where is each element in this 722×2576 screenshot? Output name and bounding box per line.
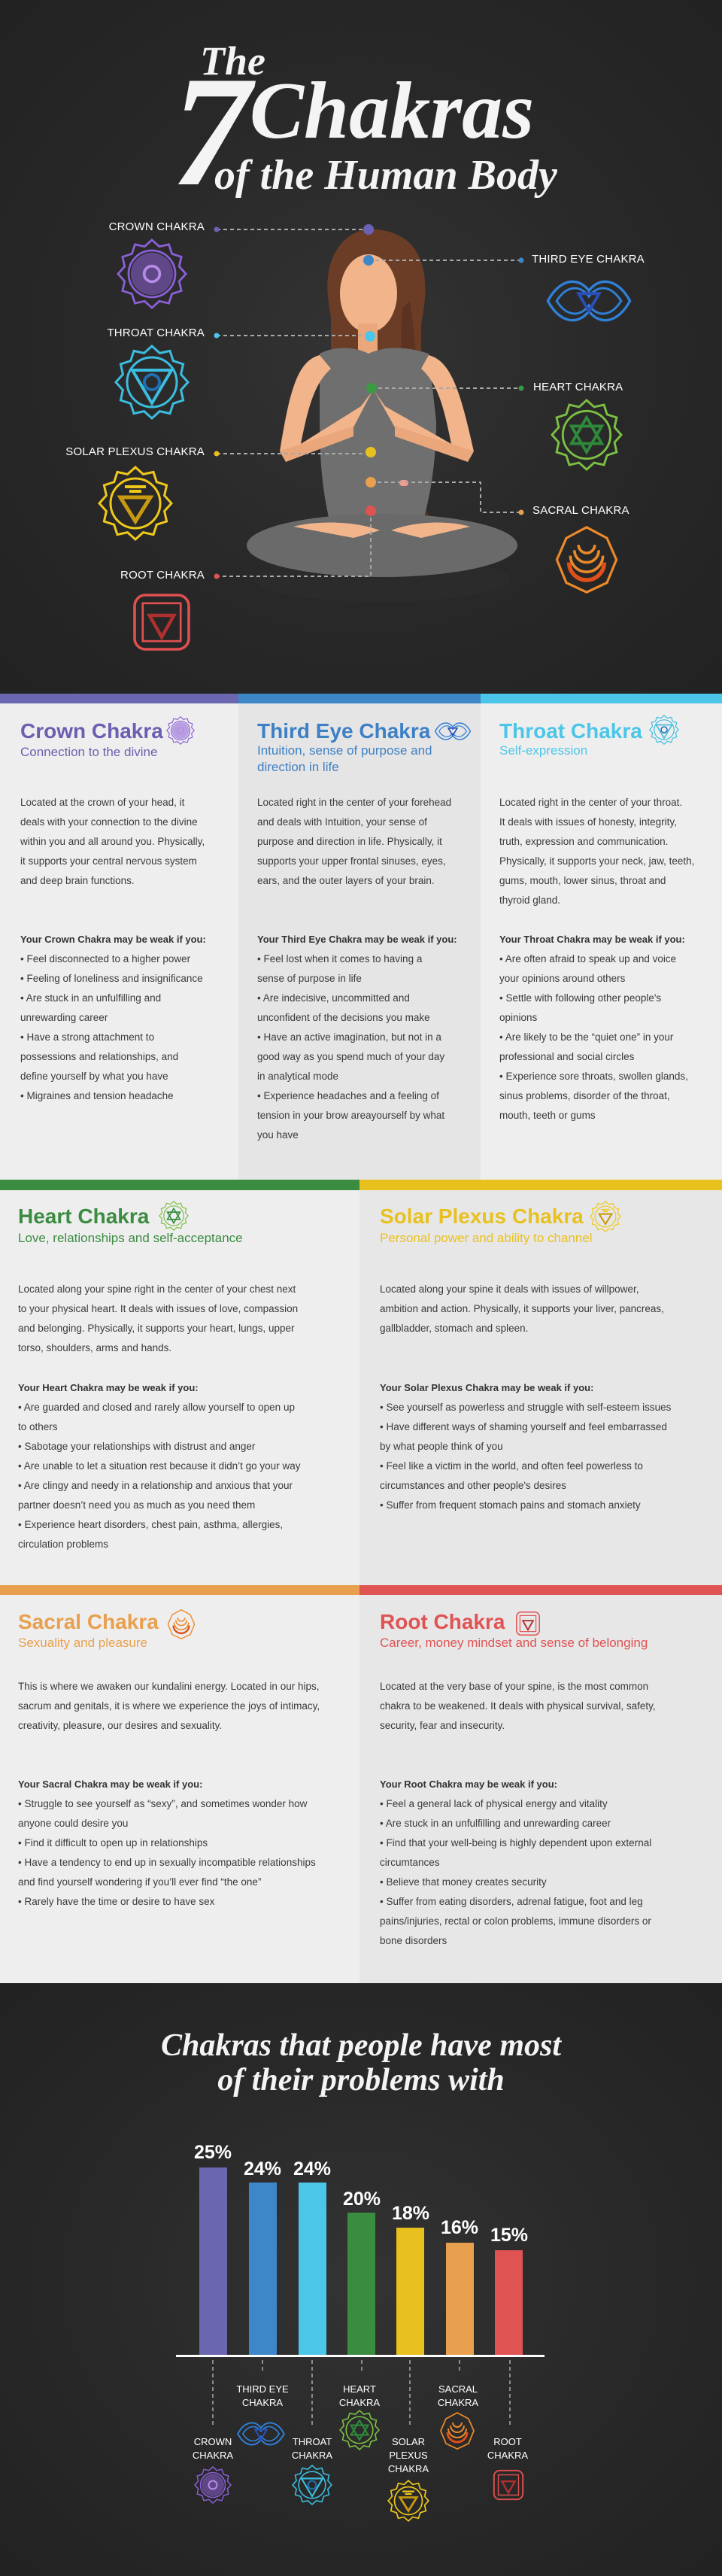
weak list: opinions: [499, 1012, 537, 1023]
weak list: [18, 1779, 316, 1907]
subtitle: Connection to the divine: [20, 745, 157, 759]
title: The 7 Chakras of the Human Body: Chakras: [250, 66, 534, 156]
weak list: possessions and relationships, and: [20, 1051, 178, 1062]
body text: This is where we awaken our kundalini energy. Located in our hips,: [18, 1681, 319, 1692]
subtitle: Career, money mindset and sense of belonging: [380, 1636, 648, 1650]
weak list: • Are stuck in an unfulfilling and unrewarding career: [380, 1818, 611, 1829]
subtitle: direction in life: [257, 760, 339, 774]
chart labels and icons: CROWN: [194, 2436, 232, 2447]
subtitle: Self-expression: [499, 743, 587, 758]
title: The 7 Chakras of the Human Body: [171, 38, 557, 219]
body text: torso, shoulders, arms and hands.: [18, 1342, 171, 1353]
chart section: HEART: [343, 2383, 376, 2395]
body text: Physically, it supports your neck, jaw, teeth,: [499, 855, 694, 867]
weak list: good way as you spend much of your day: [257, 1051, 444, 1062]
weak list: • Are clingy and needy in a relationship and anxious that your: [18, 1480, 293, 1491]
body text: thyroid gland.: [499, 895, 560, 906]
label: heart chakra: HEART CHAKRA: [533, 381, 623, 393]
body text: Located along your spine it deals with issues of willpower,: [380, 1283, 639, 1295]
weak list: anyone could desire you: [18, 1818, 128, 1829]
body text: ambition and action. Physically, it supports your liver, pancreas,: [380, 1303, 664, 1314]
weak list: pains/injuries, rectal or colon problems, immune disorders or: [380, 1915, 651, 1927]
subtitle: Intuition, sense of purpose and: [257, 743, 432, 758]
weak list: circumtances: [380, 1857, 440, 1868]
panel: solar plexus chakra: [359, 1190, 722, 1585]
icon: throat small: [649, 715, 679, 745]
body text: ears, and the outer layers of your brain.: [257, 875, 435, 886]
body text: and deep brain functions.: [20, 875, 135, 886]
body text: It deals with issues of honesty, integrity,: [499, 816, 677, 828]
body text: [18, 1681, 320, 1731]
weak list: • Migraines and tension headache: [20, 1090, 174, 1101]
body text: and belonging. Physically, it supports your heart, lungs, upper: [18, 1323, 294, 1334]
body text: [380, 1283, 664, 1334]
label: solar plexus chakra: SOLAR PLEXUS CHAKRA: [65, 445, 205, 458]
panel: sacral chakra: [0, 1595, 359, 1983]
bar: sacral 16%: 16%: [441, 2217, 478, 2238]
body text: and deals with Intuition, your sense of: [257, 816, 427, 828]
weak list: Your Throat Chakra may be weak if you:: [499, 934, 685, 945]
label: throat chakra: THROAT CHAKRA: [107, 327, 205, 339]
icon: third eye: [546, 280, 632, 322]
weak list: • Are likely to be the “quiet one” in your: [499, 1031, 673, 1043]
chart section: PLEXUS: [389, 2450, 428, 2461]
chart section: CHAKRA: [242, 2397, 283, 2408]
chart section: CHAKRA: [292, 2450, 332, 2461]
body text: [257, 797, 451, 886]
body text: creativity, pleasure, our desires and sexuality.: [18, 1720, 222, 1731]
body text: gums, mouth, lower sinus, throat and: [499, 875, 666, 886]
weak list: • Have an active imagination, but not in a: [257, 1031, 441, 1043]
icon: crown: [117, 238, 187, 309]
chart title: [161, 2028, 563, 2098]
icon: sacral small: [167, 1609, 196, 1639]
bar: root 15%: [490, 2225, 528, 2356]
heading: crown: Crown Chakra: [20, 719, 163, 743]
weak list: to others: [18, 1421, 58, 1432]
heading: heart: Heart Chakra: [18, 1204, 149, 1228]
weak list: • Experience headaches and a feeling of: [257, 1090, 439, 1101]
body text: purpose and direction in life. Physically, it: [257, 836, 442, 847]
weak list: [380, 1779, 651, 1946]
weak list: • Experience sore throats, swollen glands,: [499, 1071, 688, 1082]
body text: Located at the crown of your head, it: [20, 797, 184, 808]
panel: throat chakra: [481, 703, 722, 1180]
chart section: CHAKRA: [438, 2397, 478, 2408]
bar: third eye 24%: [244, 2158, 281, 2356]
icon: solar plexus: [98, 466, 173, 541]
weak list: • Have a tendency to end up in sexually incompatible relationships: [18, 1857, 316, 1868]
section 2 color bars: [0, 1180, 722, 1190]
icon: third eye small: [435, 722, 471, 740]
chart section: CHAKRA: [487, 2450, 528, 2461]
weak list: • Struggle to see yourself as “sexy”, and sometimes wonder how: [18, 1798, 307, 1809]
body text: security, fear and insecurity.: [380, 1720, 505, 1731]
bar: solar plexus 18%: 18%: [392, 2203, 429, 2224]
subtitle: Love, relationships and self-acceptance: [18, 1231, 243, 1245]
panel: heart chakra: [0, 1190, 359, 1585]
weak list: • See yourself as powerless and struggle with self-esteem issues: [380, 1402, 671, 1413]
weak list: and find yourself wondering if you’ll ever find “the one”: [18, 1876, 261, 1888]
body text: within you and all around you. Physically,: [20, 836, 205, 847]
icon: heart: [551, 399, 623, 471]
chart title: of their problems with: [217, 2063, 505, 2098]
title: The 7 Chakras of the Human Body: The: [200, 38, 265, 84]
label: sacral chakra: SACRAL CHAKRA: [532, 504, 629, 517]
bar: heart 20%: [343, 2189, 381, 2356]
weak list: • Sabotage your relationships with distrust and anger: [18, 1441, 255, 1452]
weak list: • Believe that money creates security: [380, 1876, 547, 1888]
heading: root: Root Chakra: [380, 1610, 505, 1633]
body text: Located at the very base of your spine, is the most common: [380, 1681, 648, 1692]
label: root chakra: ROOT CHAKRA: [120, 569, 205, 582]
weak list: Your Third Eye Chakra may be weak if you:: [257, 934, 457, 945]
weak list: [18, 1382, 301, 1550]
bar: crown 25%: 25%: [194, 2142, 232, 2163]
weak list: [499, 934, 688, 1121]
subtitle: Sexuality and pleasure: [18, 1636, 147, 1650]
weak list: circulation problems: [18, 1539, 108, 1550]
weak list: circumstances and other people's desires: [380, 1480, 566, 1491]
bar: heart 20%: 20%: [343, 2189, 381, 2210]
weak list: sense of purpose in life: [257, 973, 362, 984]
title: The 7 Chakras of the Human Body: 7: [171, 44, 250, 219]
chart section: THIRD EYE: [236, 2383, 289, 2395]
weak list: unconfident of the decisions you make: [257, 1012, 430, 1023]
weak list: Your Heart Chakra may be weak if you:: [18, 1382, 199, 1393]
weak list: • Suffer from frequent stomach pains and stomach anxiety: [380, 1499, 641, 1511]
weak list: mouth, teeth or gums: [499, 1110, 596, 1121]
illustration: meditating woman: [247, 229, 517, 577]
icon: root: [133, 594, 190, 651]
icon: root small: [516, 1612, 540, 1636]
body text: sacrum and genitals, it is where we experience the joys of intimacy,: [18, 1700, 320, 1712]
chart section: CHAKRA: [388, 2463, 429, 2474]
body text: [18, 1283, 298, 1353]
panel: third eye chakra: [238, 703, 481, 1180]
weak list: • Are unable to let a situation rest because it didn’t go your way: [18, 1460, 300, 1472]
weak list: • Have a strong attachment to: [20, 1031, 154, 1043]
chart title: Chakras that people have most: [161, 2028, 561, 2063]
weak list: • Are stuck in an unfulfilling and: [20, 992, 161, 1004]
chart section: THROAT: [293, 2436, 332, 2447]
weak list: professional and social circles: [499, 1051, 634, 1062]
weak list: unrewarding career: [20, 1012, 108, 1023]
label: crown chakra: CROWN CHAKRA: [109, 220, 205, 233]
icon: throat: [114, 345, 190, 420]
panel: crown chakra: [0, 703, 238, 1180]
chart labels and icons: [193, 2436, 233, 2461]
bar: solar plexus 18%: [392, 2203, 429, 2356]
weak list: • Find it difficult to open up in relationships: [18, 1837, 208, 1848]
weak list: [20, 934, 206, 1101]
label: third eye chakra: THIRD EYE CHAKRA: [532, 253, 645, 266]
heading: solar plexus: Solar Plexus Chakra: [380, 1204, 584, 1228]
bar: crown 25%: [194, 2142, 232, 2356]
body text: Located right in the center of your throat.: [499, 797, 682, 808]
weak list: • Find that your well-being is highly dependent upon external: [380, 1837, 651, 1848]
weak list: Your Root Chakra may be weak if you:: [380, 1779, 557, 1790]
subtitle: [257, 743, 432, 774]
connector lines (dashed): [214, 224, 523, 579]
chart section: SOLAR: [392, 2436, 425, 2447]
chart section: [0, 1983, 722, 2576]
bar: third eye 24%: 24%: [244, 2158, 281, 2180]
icon: sacral: [555, 526, 618, 594]
weak list: partner doesn’t need you as much as you need them: [18, 1499, 255, 1511]
panel: root chakra: [359, 1595, 722, 1983]
body text: deals with your connection to the divine: [20, 816, 198, 828]
weak list: you have: [257, 1129, 299, 1141]
weak list: • Feel like a victim in the world, and often feel powerless to: [380, 1460, 643, 1472]
bar: throat 24%: [293, 2158, 331, 2356]
chakra dots on body: [214, 224, 523, 579]
weak list: • Suffer from eating disorders, adrenal fatigue, foot and leg: [380, 1896, 643, 1907]
weak list: • Are often afraid to speak up and voice: [499, 953, 676, 964]
weak list: your opinions around others: [499, 973, 625, 984]
chart section: ROOT: [493, 2436, 522, 2447]
weak list: Your Solar Plexus Chakra may be weak if you:: [380, 1382, 593, 1393]
weak list: • Rarely have the time or desire to have sex: [18, 1896, 214, 1907]
icon: crown small: [166, 716, 195, 745]
body text: Located along your spine right in the center of your chest next: [18, 1283, 296, 1295]
heading: third eye: Third Eye Chakra: [257, 719, 430, 743]
weak list: by what people think of you: [380, 1441, 503, 1452]
section 3 color bars: [0, 1585, 722, 1595]
body text: [380, 1681, 656, 1731]
weak list: sinus problems, disorder of the throat,: [499, 1090, 670, 1101]
icon: heart small: [159, 1201, 189, 1231]
weak list: [257, 934, 457, 1141]
subtitle: Personal power and ability to channel: [380, 1231, 593, 1245]
weak list: Your Crown Chakra may be weak if you:: [20, 934, 206, 945]
weak list: define yourself by what you have: [20, 1071, 168, 1082]
weak list: • Feel disconnected to a higher power: [20, 953, 190, 964]
bar: sacral 16%: [441, 2217, 478, 2356]
body text: it supports your central nervous system: [20, 855, 197, 867]
body text: to your physical heart. It deals with issues of love, compassion: [18, 1303, 298, 1314]
bar: root 15%: 15%: [490, 2225, 528, 2246]
heading: sacral: Sacral Chakra: [18, 1610, 159, 1633]
weak list: tension in your brow areayourself by what: [257, 1110, 444, 1121]
bar chart: [176, 2142, 545, 2425]
chart section: CHAKRA: [339, 2397, 380, 2408]
chart labels and icons: CHAKRA: [193, 2450, 233, 2461]
body text: [499, 797, 694, 906]
chart section: SACRAL: [438, 2383, 478, 2395]
weak list: • Are guarded and closed and rarely allow yourself to open up: [18, 1402, 295, 1413]
section 1 color bars: [0, 694, 722, 703]
bar: throat 24%: 24%: [293, 2158, 331, 2180]
weak list: • Are indecisive, uncommitted and: [257, 992, 410, 1004]
weak list: • Have different ways of shaming yourself and feel embarrassed: [380, 1421, 667, 1432]
weak list: Your Sacral Chakra may be weak if you:: [18, 1779, 202, 1790]
weak list: • Feeling of loneliness and insignificance: [20, 973, 203, 984]
weak list: • Settle with following other people's: [499, 992, 661, 1004]
heading: throat: Throat Chakra: [499, 719, 642, 743]
weak list: [380, 1382, 671, 1511]
header section: [0, 0, 722, 694]
weak list: bone disorders: [380, 1935, 447, 1946]
body text: supports your upper frontal sinuses, eyes,: [257, 855, 446, 867]
weak list: • Experience heart disorders, chest pain, asthma, allergies,: [18, 1519, 283, 1530]
body text: gallbladder, stomach and spleen.: [380, 1323, 528, 1334]
icon: solar small: [590, 1201, 621, 1232]
weak list: in analytical mode: [257, 1071, 338, 1082]
body text: truth, expression and communication.: [499, 836, 668, 847]
weak list: • Feel lost when it comes to having a: [257, 953, 422, 964]
body text: Located right in the center of your forehead: [257, 797, 451, 808]
body text: chakra to be weakened. It deals with physical survival, safety,: [380, 1700, 656, 1712]
title: The 7 Chakras of the Human Body: of the Human Body: [214, 152, 557, 199]
body text: [20, 797, 205, 886]
weak list: • Feel a general lack of physical energy and vitality: [380, 1798, 608, 1809]
